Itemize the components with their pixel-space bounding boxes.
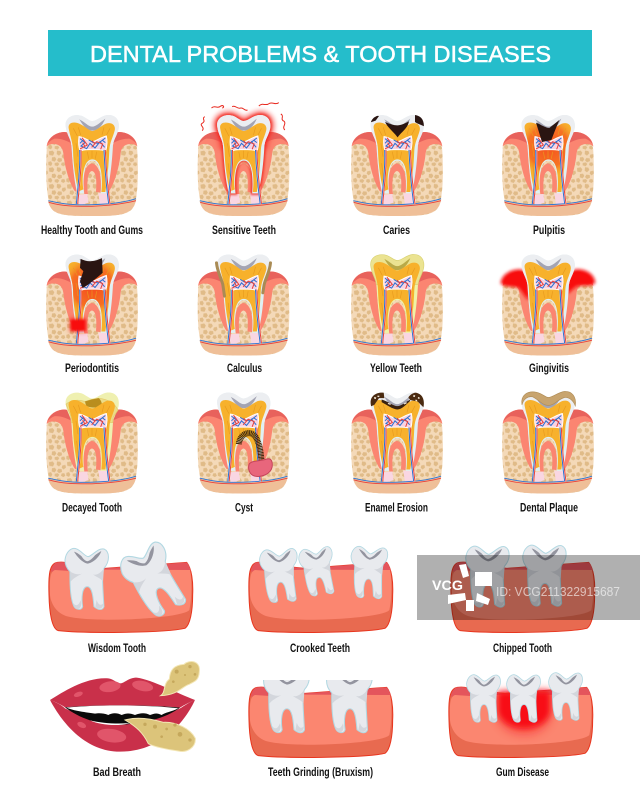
label: cyst: Cyst bbox=[235, 502, 253, 514]
tooth illustration: calculus along gum line bbox=[198, 254, 289, 355]
label: wisdom tooth: Wisdom Tooth bbox=[88, 643, 146, 655]
gum block bbox=[449, 687, 593, 757]
panel: pulpitis bbox=[502, 115, 594, 237]
panel: yellow teeth bbox=[351, 254, 443, 375]
lip highlights bbox=[73, 679, 154, 744]
gum block with ground teeth bbox=[249, 687, 393, 757]
tooth illustration: enamel erosion with brown spots bbox=[351, 392, 443, 493]
label: bad breath: Bad Breath bbox=[93, 767, 141, 779]
chipped molars bbox=[466, 545, 566, 607]
cyst blob bbox=[249, 459, 272, 476]
lower lip bbox=[50, 700, 195, 752]
panel: caries bbox=[351, 115, 443, 237]
panel: periodontitis bbox=[46, 254, 138, 375]
label: periodontitis: Periodontitis bbox=[65, 363, 119, 375]
tooth illustration: healthy bbox=[46, 115, 138, 216]
impacted wisdom molar bbox=[116, 539, 192, 623]
watermark band: ID: VCG211322915687 bbox=[496, 584, 620, 599]
label: calculus: Calculus bbox=[227, 363, 262, 375]
label: enamel erosion: Enamel Erosion bbox=[365, 502, 428, 514]
panel: gingivitis bbox=[501, 254, 595, 375]
label: healthy tooth and gums: Healthy Tooth and Gums bbox=[41, 225, 143, 237]
crooked molars bbox=[259, 546, 388, 603]
label: decayed tooth: Decayed Tooth bbox=[62, 502, 122, 514]
label: dental plaque: Dental Plaque bbox=[520, 502, 578, 514]
tooth illustration: periodontitis with deep cavity and abscess bbox=[46, 254, 138, 355]
watermark band bbox=[417, 555, 640, 620]
panel: cyst bbox=[198, 392, 289, 514]
label: gum disease: Gum Disease bbox=[496, 767, 549, 779]
teeth bbox=[67, 705, 178, 715]
gum block with wisdom tooth bbox=[49, 562, 193, 632]
smell specks bbox=[143, 665, 196, 742]
panel: decayed tooth bbox=[46, 392, 138, 514]
tooth illustration: caries with dark cavities bbox=[351, 115, 443, 216]
panel: sensitive teeth bbox=[198, 103, 289, 237]
label: crooked teeth: Crooked Teeth bbox=[290, 643, 350, 655]
label: chipped tooth: Chipped Tooth bbox=[493, 643, 552, 655]
upper lip bbox=[50, 678, 195, 708]
tooth illustration: dental plaque cap bbox=[502, 391, 594, 493]
tooth illustration: gingivitis with red gums bbox=[501, 254, 595, 355]
panel: wisdom tooth bbox=[49, 539, 193, 655]
lower smell cloud bbox=[125, 718, 195, 751]
panel: gum disease bbox=[449, 673, 593, 779]
label: pulpitis: Pulpitis bbox=[533, 225, 565, 237]
title banner bbox=[48, 30, 592, 76]
upper smell cloud bbox=[161, 661, 199, 696]
gum block with crooked teeth bbox=[249, 562, 393, 632]
label: yellow teeth: Yellow Teeth bbox=[370, 363, 422, 375]
panel: dental plaque bbox=[502, 391, 594, 514]
molars bbox=[467, 673, 583, 722]
watermark band: VCG bbox=[432, 577, 463, 593]
panel: healthy tooth and gums bbox=[41, 115, 143, 237]
panel: crooked teeth bbox=[249, 546, 393, 655]
label: teeth grinding: Teeth Grinding (Bruxism) bbox=[268, 767, 373, 779]
tooth illustration: sensitive with red glow bbox=[198, 103, 289, 216]
label: gingivitis: Gingivitis bbox=[529, 363, 569, 375]
panel: calculus bbox=[198, 254, 289, 375]
panel: enamel erosion bbox=[351, 392, 443, 514]
tooth illustration: pulpitis with inflamed dentin bbox=[502, 115, 594, 216]
label: caries: Caries bbox=[383, 225, 410, 237]
gum block with chipped teeth bbox=[451, 562, 595, 632]
flattened molars bbox=[263, 680, 372, 734]
label: sensitive teeth: Sensitive Teeth bbox=[212, 225, 276, 237]
mouth interior bbox=[65, 705, 180, 725]
panel: chipped tooth bbox=[451, 545, 595, 655]
inflamed gum patch bbox=[497, 690, 551, 734]
tooth illustration: yellow enamel bbox=[351, 254, 443, 355]
panel: teeth grinding bbox=[249, 669, 393, 779]
tooth illustration: cyst at root tip bbox=[198, 392, 289, 493]
title banner: DENTAL PROBLEMS & TOOTH DISEASES bbox=[90, 41, 551, 67]
tooth illustration: decayed with yellow jagged crown bbox=[46, 392, 138, 493]
lips and smell clouds bbox=[50, 661, 199, 752]
panel: bad breath bbox=[50, 661, 199, 779]
molar upright bbox=[65, 548, 108, 610]
